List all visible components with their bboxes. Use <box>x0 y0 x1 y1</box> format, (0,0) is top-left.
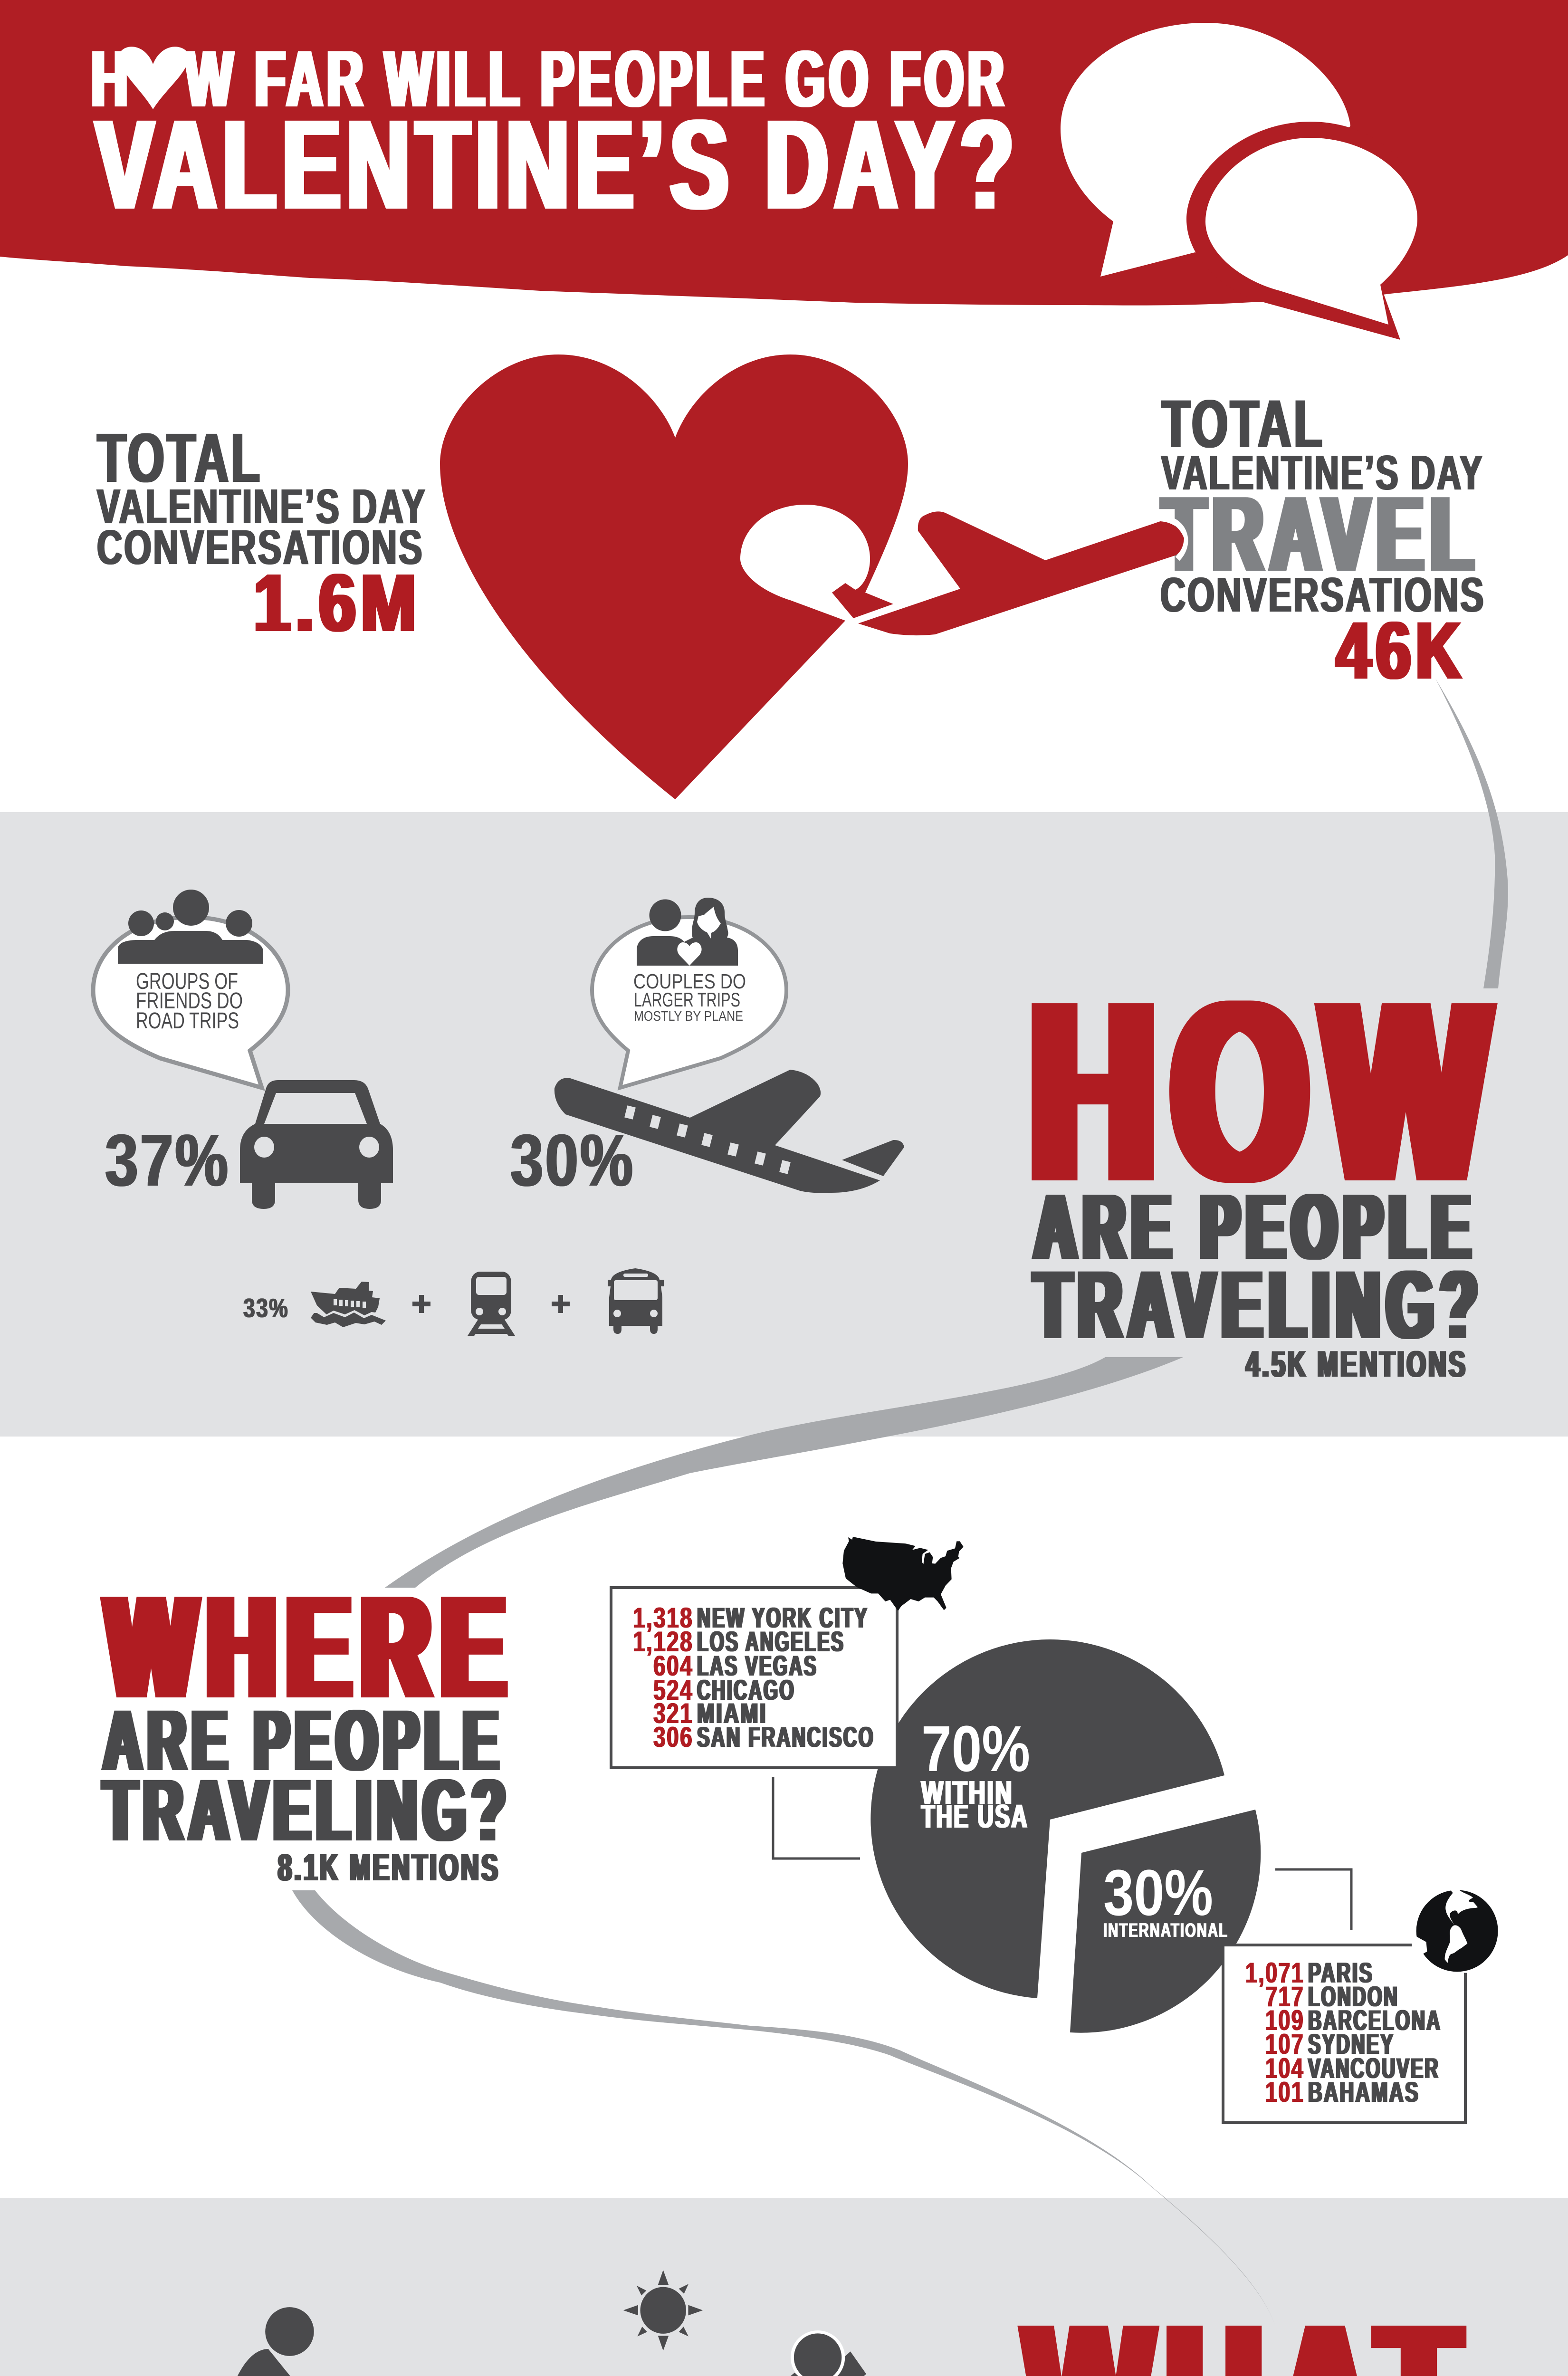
pie chart <box>870 1639 1261 2033</box>
stat: 33 percent other transport: 33% <box>243 1293 289 1323</box>
ribbon: total to how <box>1435 679 1508 988</box>
USA city list box: 1,318 <box>633 1602 693 1634</box>
bubble: couples: COUPLES DO <box>633 970 746 993</box>
ribbon: where to what <box>292 1890 1275 2326</box>
bubble: groups of friends: FRIENDS DO <box>136 988 243 1014</box>
where heading: 8.1K MENTIONS <box>278 1846 500 1888</box>
international city list box: 104 <box>1265 2052 1304 2084</box>
international city list box: 109 <box>1265 2004 1304 2036</box>
bubble: couples <box>592 898 786 1088</box>
icon: plus <box>552 1295 570 1313</box>
icon: USA map <box>842 1537 964 1611</box>
total conversations: VALENTINE’S DAY <box>97 479 427 534</box>
total conversations: CONVERSATIONS <box>97 520 424 575</box>
bubble: groups of friends: ROAD TRIPS <box>136 1008 239 1034</box>
USA city list box: SAN FRANCISCO <box>697 1721 875 1753</box>
USA city list box: NEW YORK CITY <box>697 1602 869 1634</box>
total travel conversations <box>1160 386 1485 696</box>
where heading: WHERE <box>107 1565 516 1729</box>
international city list box: 101 <box>1265 2076 1304 2108</box>
international city list box: BARCELONA <box>1308 2004 1442 2036</box>
panel: what are travelers seeking background <box>0 2198 1568 2376</box>
international city list box: 717 <box>1265 1981 1304 2012</box>
icon: title heart <box>119 47 189 109</box>
USA city list box: MIAMI <box>697 1697 767 1729</box>
connector lines <box>773 1777 1351 1930</box>
international city list box: 1,071 <box>1245 1957 1304 1989</box>
title: W FAR WILL PEOPLE GO FOR <box>185 34 1008 124</box>
bubble: groups of friends <box>93 890 288 1088</box>
total conversations: TOTAL <box>97 419 262 497</box>
label: 70 percent within the USA: THE USA <box>921 1798 1029 1835</box>
how heading <box>1031 947 1505 1385</box>
USA city list box <box>611 1588 897 1768</box>
total travel conversations: TOTAL <box>1162 386 1325 462</box>
label: 30 percent international: INTERNATIONAL <box>1103 1919 1228 1941</box>
ribbon: how to where <box>385 1357 1183 1588</box>
icon: red plane <box>858 511 1185 635</box>
international city list box: 107 <box>1265 2028 1304 2060</box>
icon: globe <box>1411 1885 1498 1973</box>
icon: bus <box>608 1268 664 1334</box>
international city list box: PARIS <box>1308 1957 1374 1989</box>
USA city list box: LOS ANGELES <box>697 1626 845 1657</box>
international city list box: BAHAMAS <box>1308 2076 1420 2108</box>
icon: train <box>468 1272 515 1336</box>
total travel conversations: 46K <box>1336 605 1466 696</box>
label: 70 percent within the USA: 70% <box>921 1713 1030 1785</box>
international city list box: SYDNEY <box>1308 2028 1395 2060</box>
icon: ship <box>311 1282 386 1327</box>
icon: couple <box>637 898 738 966</box>
icon: beach lounger <box>589 2332 866 2376</box>
icon: group of friends <box>118 890 263 964</box>
bubble: couples: MOSTLY BY PLANE <box>634 1009 743 1024</box>
USA city list box: 321 <box>653 1697 693 1729</box>
stat: 37 percent: 37% <box>105 1119 230 1201</box>
pie slice: 30 percent international <box>1070 1810 1261 2033</box>
where heading: TRAVELING? <box>104 1762 512 1859</box>
panel: how are people traveling background <box>0 812 1568 1437</box>
bubble: groups of friends: GROUPS OF <box>136 969 238 994</box>
label: 70 percent within the USA: WITHIN <box>921 1774 1013 1811</box>
international city list box <box>1223 1945 1465 2123</box>
icon: plus <box>412 1295 430 1313</box>
label: 30 percent international: 30% <box>1103 1857 1213 1929</box>
USA city list box: CHICAGO <box>697 1674 795 1706</box>
USA city list box: 1,128 <box>633 1626 693 1657</box>
pie slice: 70 percent within the USA <box>870 1639 1224 1998</box>
total conversations: 1.6M <box>254 556 421 649</box>
icon: car <box>240 1080 393 1209</box>
title: VALENTINE’S DAY? <box>96 93 1020 236</box>
icon: speech bubbles <box>1061 23 1417 340</box>
icon: sun <box>623 2270 703 2351</box>
title: H <box>91 34 128 124</box>
icon: massage <box>119 2307 425 2376</box>
where heading: ARE PEOPLE <box>104 1692 504 1789</box>
USA city list box: LAS VEGAS <box>697 1650 818 1682</box>
bubble: couples: LARGER TRIPS <box>634 988 740 1011</box>
USA city list box: 306 <box>653 1721 693 1753</box>
USA city list box: 604 <box>653 1650 693 1682</box>
icon: gray plane <box>555 1070 904 1193</box>
title <box>91 34 1020 236</box>
label: 70 percent within the USA <box>921 1713 1030 1835</box>
icon: big heart with speech hole <box>440 354 908 799</box>
where heading <box>104 1565 516 1888</box>
total conversations <box>97 419 427 649</box>
international city list box: LONDON <box>1308 1981 1399 2012</box>
header banner <box>0 0 1568 306</box>
stat: 30 percent: 30% <box>510 1119 635 1201</box>
international city list box: VANCOUVER <box>1308 2052 1440 2084</box>
USA city list box: 524 <box>653 1674 693 1706</box>
